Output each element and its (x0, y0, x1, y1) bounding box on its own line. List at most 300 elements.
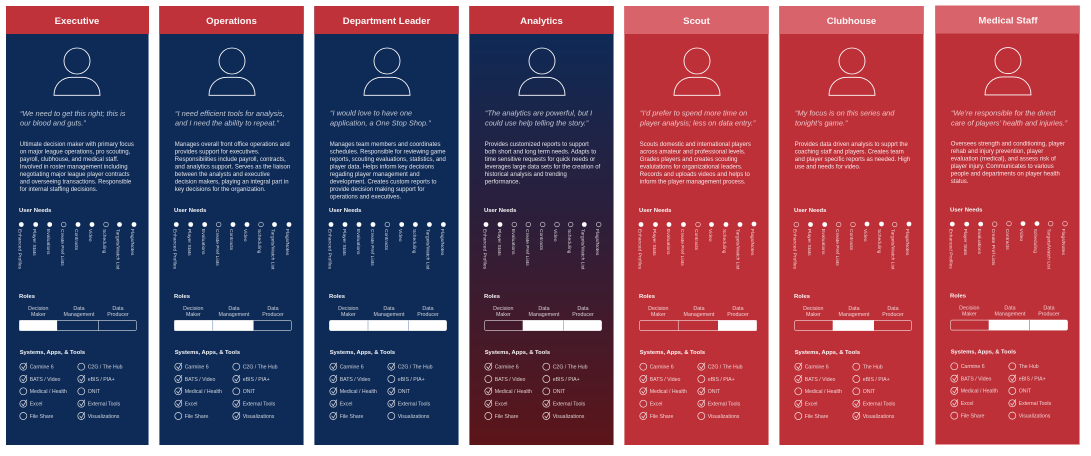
roles bar: Data (887, 306, 899, 312)
user needs chart: Flags/Notes (749, 229, 755, 256)
systems, apps and tools list: Medical / Health (340, 389, 377, 395)
roles bar (19, 294, 136, 331)
systems, apps and tools list: Visualizations (863, 414, 895, 420)
quote (485, 108, 592, 128)
roles bar (174, 294, 292, 331)
systems, apps and tools list: ONIT (708, 389, 721, 395)
systems, apps and tools list (485, 350, 588, 420)
icon: person (364, 48, 410, 95)
systems, apps and tools list: eBIS / PIA+ (553, 377, 580, 383)
heading: Medical Staff (935, 6, 1080, 34)
description: Responsibilities include payroll, contracts, (175, 157, 286, 163)
description: development. Creates custom reports to (330, 180, 437, 186)
systems, apps and tools list: File Share (30, 414, 53, 420)
icon: person (674, 48, 720, 95)
user needs chart: Scheduling (721, 229, 727, 254)
roles bar: Management (374, 312, 405, 318)
roles bar: Decision (493, 306, 514, 312)
icon: person (519, 48, 565, 95)
user needs chart (16, 208, 136, 270)
description: leverages large data sets for the creation of (485, 164, 601, 170)
systems, apps and tools list: External Tools (863, 402, 896, 408)
quote: “We’re responsible for the direct (951, 109, 1057, 118)
user needs chart: Create Pref Lists (59, 229, 65, 266)
systems, apps and tools list: File Share (185, 414, 208, 420)
systems, apps and tools list: Visualizations (88, 414, 120, 420)
quote: “We need to get this right; this is (20, 109, 126, 118)
systems, apps and tools list: Excel (495, 402, 507, 408)
user needs chart: Evaluations (200, 229, 206, 255)
roles bar (950, 294, 1068, 330)
roles bar: Decision (338, 306, 359, 312)
description: schedules. Responsible for reviewing game (330, 150, 446, 156)
roles bar: Decision (648, 306, 669, 312)
systems, apps and tools list: C2G / The Hub (88, 364, 123, 370)
icon: person (829, 48, 875, 95)
roles bar: Data (848, 306, 860, 312)
user needs chart: Contracts (538, 229, 544, 251)
quote (951, 109, 1068, 127)
quote: “I’d prefer to spend more time on (640, 108, 747, 118)
roles bar: Producer (262, 312, 284, 318)
roles bar: Management (839, 312, 870, 318)
user needs chart (948, 208, 1067, 270)
user needs chart: Enhanced Profiles (326, 229, 332, 270)
user needs chart: Flags/Notes (284, 229, 290, 256)
user needs chart: User Needs (794, 208, 827, 214)
roles bar: Producer (1038, 311, 1060, 317)
roles bar: Decision (28, 306, 49, 312)
heading: Operations (159, 6, 304, 34)
systems, apps and tools list: External Tools (88, 402, 121, 408)
systems, apps and tools list: eBIS / PIA+ (1019, 376, 1046, 382)
systems, apps and tools list: Systems, Apps, & Tools (795, 350, 860, 356)
description: payroll, clubhouse, and medical staff. (20, 157, 119, 163)
systems, apps and tools list: ONIT (863, 389, 876, 395)
description: reports, scouting evaluations, statistics, and (330, 157, 446, 163)
roles bar: Producer (107, 312, 129, 318)
user needs chart: Contracts (383, 229, 389, 251)
user needs chart: Scheduling (876, 229, 882, 254)
user needs chart: Player Stats (186, 229, 192, 256)
systems, apps and tools list (640, 350, 743, 420)
roles bar: Maker (651, 312, 666, 318)
roles bar: Maker (496, 312, 511, 318)
user needs chart: Targets/Watch List (115, 229, 121, 270)
icon: person (54, 48, 100, 95)
description (175, 142, 290, 193)
description: historical analysis and trending (485, 172, 567, 178)
description: evaluation (medical), and assess risk of (951, 157, 1056, 163)
user needs chart: Targets/Watch List (580, 229, 586, 270)
systems, apps and tools list: C2G / The Hub (708, 364, 743, 370)
user needs chart (172, 208, 291, 270)
user needs chart: Evaluations (665, 229, 671, 255)
systems, apps and tools list: Medical / Health (185, 389, 222, 395)
panel: Executive (6, 6, 149, 445)
description: inform the player management process. (640, 180, 746, 186)
description: Manages overall front office operations and (175, 142, 290, 148)
systems, apps and tools list: External Tools (398, 402, 431, 408)
systems, apps and tools list: External Tools (708, 402, 741, 408)
user needs chart: Contracts (1004, 229, 1010, 250)
user needs chart: Enhanced Profiles (948, 229, 954, 269)
quote: “I need efficient tools for analysis, (175, 109, 285, 118)
panel: Medical Staff (935, 6, 1080, 445)
user needs chart: Create Pref Lists (214, 229, 220, 266)
user needs chart: Scheduling (1032, 229, 1038, 253)
systems, apps and tools list: Systems, Apps, & Tools (330, 350, 395, 356)
systems, apps and tools list: File Share (961, 413, 984, 419)
systems, apps and tools list: BATS / Video (185, 377, 215, 383)
user needs chart: Targets/Watch List (425, 229, 431, 270)
roles bar: Data (1004, 306, 1016, 312)
user needs chart: Video (242, 229, 248, 242)
description: people and departments on player health (951, 172, 1060, 178)
user needs chart: Enhanced Profiles (792, 229, 798, 270)
user needs chart: Enhanced Profiles (172, 229, 178, 270)
description: decision makers, playing an integral part in (175, 180, 289, 186)
roles bar: Roles (19, 294, 36, 300)
description: negotiating major league player contracts (20, 172, 130, 178)
user needs chart: Video (707, 229, 713, 242)
systems, apps and tools list: Visualizations (243, 414, 275, 420)
user needs chart: Targets/Watch List (890, 229, 896, 270)
user needs chart: Scheduling (101, 229, 107, 254)
description: key decisions for the organization. (175, 187, 266, 193)
systems, apps and tools list: Medical / Health (961, 389, 998, 395)
quote: our blood and guts.” (20, 119, 86, 128)
systems, apps and tools list: Visualizations (708, 414, 740, 420)
systems, apps and tools list: Carmine 6 (30, 364, 54, 370)
systems, apps and tools list: The Hub (863, 364, 883, 370)
user needs chart: Flags/Notes (1060, 229, 1066, 255)
user needs chart: User Needs (950, 208, 983, 214)
roles bar: Decision (959, 306, 980, 312)
quote (175, 109, 285, 128)
systems, apps and tools list: Systems, Apps, & Tools (951, 350, 1016, 356)
roles bar: Decision (183, 306, 204, 312)
panel: Department Leader (314, 6, 459, 445)
systems, apps and tools list: ONIT (398, 389, 411, 395)
systems, apps and tools list: ONIT (88, 389, 101, 395)
user needs chart: Player Stats (806, 229, 812, 256)
systems, apps and tools list: ONIT (1019, 389, 1032, 395)
roles bar: Roles (794, 294, 811, 300)
panel: Scout (624, 6, 769, 445)
user needs chart: Evaluations (820, 229, 826, 255)
roles bar: Decision (803, 306, 824, 312)
systems, apps and tools list: Medical / Health (495, 389, 532, 395)
heading: Operations: Operations (206, 16, 257, 27)
roles bar: Data (112, 306, 124, 312)
quote: “I would love to have one (330, 108, 412, 118)
systems, apps and tools list: Excel (961, 401, 973, 407)
quote (639, 108, 756, 128)
user needs chart: Contracts (228, 229, 234, 251)
roles bar: Management (684, 312, 715, 318)
systems, apps and tools list: Carmine 6 (961, 364, 985, 370)
description: Ultimate decision maker with primary focus (20, 142, 134, 148)
user needs chart: Create Pref Lists (369, 229, 375, 266)
systems, apps and tools list: Carmine 6 (340, 364, 364, 370)
description (485, 142, 601, 186)
quote: “The analytics are powerful, but I (485, 108, 592, 118)
systems, apps and tools list: ONIT (243, 389, 256, 395)
quote (795, 108, 895, 128)
description: Provides customized reports to support (485, 142, 589, 148)
description: across amateur and professional levels. (640, 150, 746, 156)
user needs chart: Targets/Watch List (1046, 229, 1052, 270)
description: status. (951, 179, 969, 185)
description: Grades players and creates scouting (640, 157, 738, 163)
systems, apps and tools list: C2G / The Hub (398, 364, 433, 370)
systems, apps and tools list: Medical / Health (805, 389, 842, 395)
user needs chart: Video (87, 229, 93, 242)
description: Provides data driven analysis to supprt the (795, 142, 909, 148)
roles bar (484, 294, 602, 331)
heading: Department Leader: Department Leader (343, 16, 430, 27)
systems, apps and tools list: BATS / Video (961, 376, 991, 382)
systems, apps and tools list: Carmine 6 (805, 364, 829, 370)
roles bar: Management (995, 311, 1026, 317)
description: player data. Helps inform key decisions (330, 164, 434, 170)
icon: person (985, 48, 1031, 95)
roles bar: Data (577, 306, 589, 312)
user needs chart: Flags/Notes (439, 229, 445, 256)
user needs chart: Scheduling (411, 229, 417, 254)
description (951, 142, 1065, 185)
description: rehab and injury prevention, player (951, 149, 1043, 155)
heading: Medical Staff: Medical Staff (978, 16, 1038, 27)
user needs chart (482, 208, 601, 270)
systems, apps and tools list: Systems, Apps, & Tools (175, 350, 240, 356)
quote (20, 109, 126, 128)
heading: Clubhouse: Clubhouse (827, 16, 876, 27)
systems, apps and tools list: BATS / Video (650, 377, 680, 383)
user needs chart: User Needs (484, 208, 517, 214)
user needs chart (326, 208, 446, 270)
systems, apps and tools list: BATS / Video (805, 377, 835, 383)
roles bar: Data (538, 306, 550, 312)
roles bar: Maker (806, 312, 821, 318)
user needs chart: Enhanced Profiles (482, 229, 488, 270)
roles bar: Producer (882, 312, 904, 318)
systems, apps and tools list: File Share (495, 414, 518, 420)
systems, apps and tools list: Excel (30, 402, 42, 408)
user needs chart: Enhanced Profiles (16, 229, 22, 270)
description: both short and long term needs. Adapts to (485, 150, 597, 156)
systems, apps and tools list: External Tools (553, 402, 586, 408)
description: Oversees strength and conditioning, player (951, 142, 1065, 148)
user needs chart (636, 208, 756, 270)
systems, apps and tools list: BATS / Video (30, 377, 60, 383)
roles bar: Data (693, 306, 705, 312)
systems, apps and tools list: eBIS / PIA+ (88, 377, 115, 383)
user needs chart: Contracts (848, 229, 854, 251)
description: on major league operations, pro scouting, (20, 150, 131, 156)
systems, apps and tools list: Systems, Apps, & Tools (640, 350, 705, 356)
heading: Executive (6, 6, 149, 34)
systems, apps and tools list: Excel (340, 402, 352, 408)
user needs chart: Contracts (693, 229, 699, 251)
systems, apps and tools list: eBIS / PIA+ (708, 377, 735, 383)
systems, apps and tools list: External Tools (1019, 401, 1052, 407)
panel: Operations (159, 6, 304, 445)
user needs chart: Targets/Watch List (270, 229, 276, 270)
systems, apps and tools list: File Share (805, 414, 828, 420)
description (330, 142, 446, 200)
systems, apps and tools list (795, 350, 896, 420)
user needs chart: Create Pref Lists (990, 229, 996, 266)
systems, apps and tools list: eBIS / PIA+ (863, 377, 890, 383)
roles bar: Producer (417, 312, 439, 318)
roles bar: Management (64, 312, 95, 318)
quote: player analysis; less on data entry.” (639, 118, 756, 128)
systems, apps and tools list: eBIS / PIA+ (398, 377, 425, 383)
user needs chart: Flags/Notes (904, 229, 910, 256)
systems, apps and tools list: Medical / Health (30, 389, 67, 395)
systems, apps and tools list: ONIT (553, 389, 566, 395)
description: Scouts domestic and international players (640, 142, 751, 148)
systems, apps and tools list: BATS / Video (340, 377, 370, 383)
user needs chart: Scheduling (566, 229, 572, 254)
systems, apps and tools list: The Hub (1019, 364, 1039, 370)
description: between the analysts and executive (175, 172, 271, 178)
roles bar: Producer (727, 312, 749, 318)
description: regading player management and (330, 172, 420, 178)
user needs chart: Flags/Notes (129, 229, 135, 256)
roles bar: Producer (572, 312, 594, 318)
description: performance. (485, 180, 520, 186)
quote: “My focus is on this series and (795, 108, 895, 118)
systems, apps and tools list (175, 350, 278, 420)
quote: could use help telling the story.” (485, 118, 589, 128)
roles bar: Roles (950, 294, 967, 300)
description: Manages team members and coordinates (330, 142, 441, 148)
panel: Analytics (469, 6, 614, 445)
description: operations and executives. (330, 194, 402, 200)
roles bar: Data (73, 306, 85, 312)
user needs chart: Video (552, 229, 558, 242)
user needs chart: Flags/Notes (594, 229, 600, 256)
description: Records and uploads videos and helps to (640, 172, 751, 178)
heading: Analytics (469, 6, 614, 34)
systems, apps and tools list: External Tools (243, 402, 276, 408)
user needs chart: Evaluations (976, 229, 982, 255)
user needs chart: Create Pref Lists (834, 229, 840, 266)
quote: tonight’s game.” (795, 118, 848, 128)
description: evalutations for organizational leaders. (640, 164, 743, 170)
heading: Analytics: Analytics (520, 16, 563, 27)
user needs chart: Player Stats (962, 229, 968, 256)
roles bar: Data (1043, 306, 1055, 312)
systems, apps and tools list: Excel (650, 402, 662, 408)
heading: Department Leader (314, 6, 459, 34)
systems, apps and tools list: Medical / Health (650, 389, 687, 395)
roles bar (329, 294, 447, 331)
roles bar (639, 294, 757, 331)
user needs chart: Scheduling (256, 229, 262, 254)
systems, apps and tools list: Excel (805, 402, 817, 408)
description (795, 142, 910, 170)
description: for internal staffing decisions. (20, 187, 98, 193)
quote: and I need the ability to repeat.” (175, 119, 279, 128)
description: time sensitive requests for quick needs or (485, 157, 595, 163)
description: player injury. Communicates to various (951, 164, 1054, 170)
user needs chart: Enhanced Profiles (636, 229, 642, 270)
systems, apps and tools list: Systems, Apps, & Tools (20, 350, 85, 356)
quote: application, a One Stop Shop.” (330, 118, 431, 128)
roles bar: Roles (639, 294, 656, 300)
systems, apps and tools list: Excel (185, 402, 197, 408)
systems, apps and tools list: File Share (340, 414, 363, 420)
roles bar: Maker (186, 312, 201, 318)
systems, apps and tools list: Carmine 6 (495, 364, 519, 370)
description: coaching staff and players. Creates team (795, 150, 904, 156)
description: Involved in roster management including (20, 164, 128, 170)
systems, apps and tools list (20, 350, 123, 420)
systems, apps and tools list: Visualizations (553, 414, 585, 420)
user needs chart: Video (397, 229, 403, 242)
quote: care of players’ health and injuries.” (951, 118, 1068, 127)
user needs chart: User Needs (174, 208, 207, 214)
panel: Clubhouse (779, 6, 924, 445)
systems, apps and tools list: Systems, Apps, & Tools (485, 350, 550, 356)
heading: Executive: Executive (55, 16, 99, 27)
heading: Scout: Scout (683, 16, 711, 27)
user needs chart: Player Stats (341, 229, 347, 256)
roles bar: Data (267, 306, 279, 312)
description (640, 142, 751, 186)
roles bar: Management (529, 312, 560, 318)
roles bar: Data (422, 306, 434, 312)
icon: person (209, 48, 255, 95)
systems, apps and tools list: BATS / Video (495, 377, 525, 383)
user needs chart: Targets/Watch List (735, 229, 741, 270)
roles bar (794, 294, 912, 331)
user needs chart: Player Stats (496, 229, 502, 256)
roles bar: Data (732, 306, 744, 312)
description: provides support for executives. (175, 150, 260, 156)
user needs chart (792, 208, 911, 270)
roles bar: Management (219, 312, 250, 318)
user needs chart: Player Stats (31, 229, 37, 256)
description: and analytics support. Serves as the liaison (175, 164, 290, 170)
systems, apps and tools list: C2G / The Hub (243, 364, 278, 370)
user needs chart: User Needs (329, 208, 362, 214)
user needs chart: Evaluations (355, 229, 361, 255)
heading: Scout (624, 6, 769, 34)
roles bar: Roles (329, 294, 346, 300)
user needs chart: Player Stats (651, 229, 657, 256)
roles bar: Roles (484, 294, 501, 300)
systems, apps and tools list: Carmine 6 (185, 364, 209, 370)
description: and player specific reports as needed. High (795, 157, 910, 163)
roles bar: Roles (174, 294, 191, 300)
systems, apps and tools list: C2G / The Hub (553, 364, 588, 370)
roles bar: Maker (962, 311, 977, 317)
systems, apps and tools list: Visualizations (1019, 413, 1051, 419)
user needs chart: Contracts (73, 229, 79, 251)
roles bar: Maker (31, 312, 46, 318)
user needs chart: Evaluations (510, 229, 516, 255)
quote (330, 108, 431, 128)
roles bar: Data (383, 306, 395, 312)
systems, apps and tools list (330, 350, 433, 420)
roles bar: Data (228, 306, 240, 312)
user needs chart: User Needs (19, 208, 52, 214)
